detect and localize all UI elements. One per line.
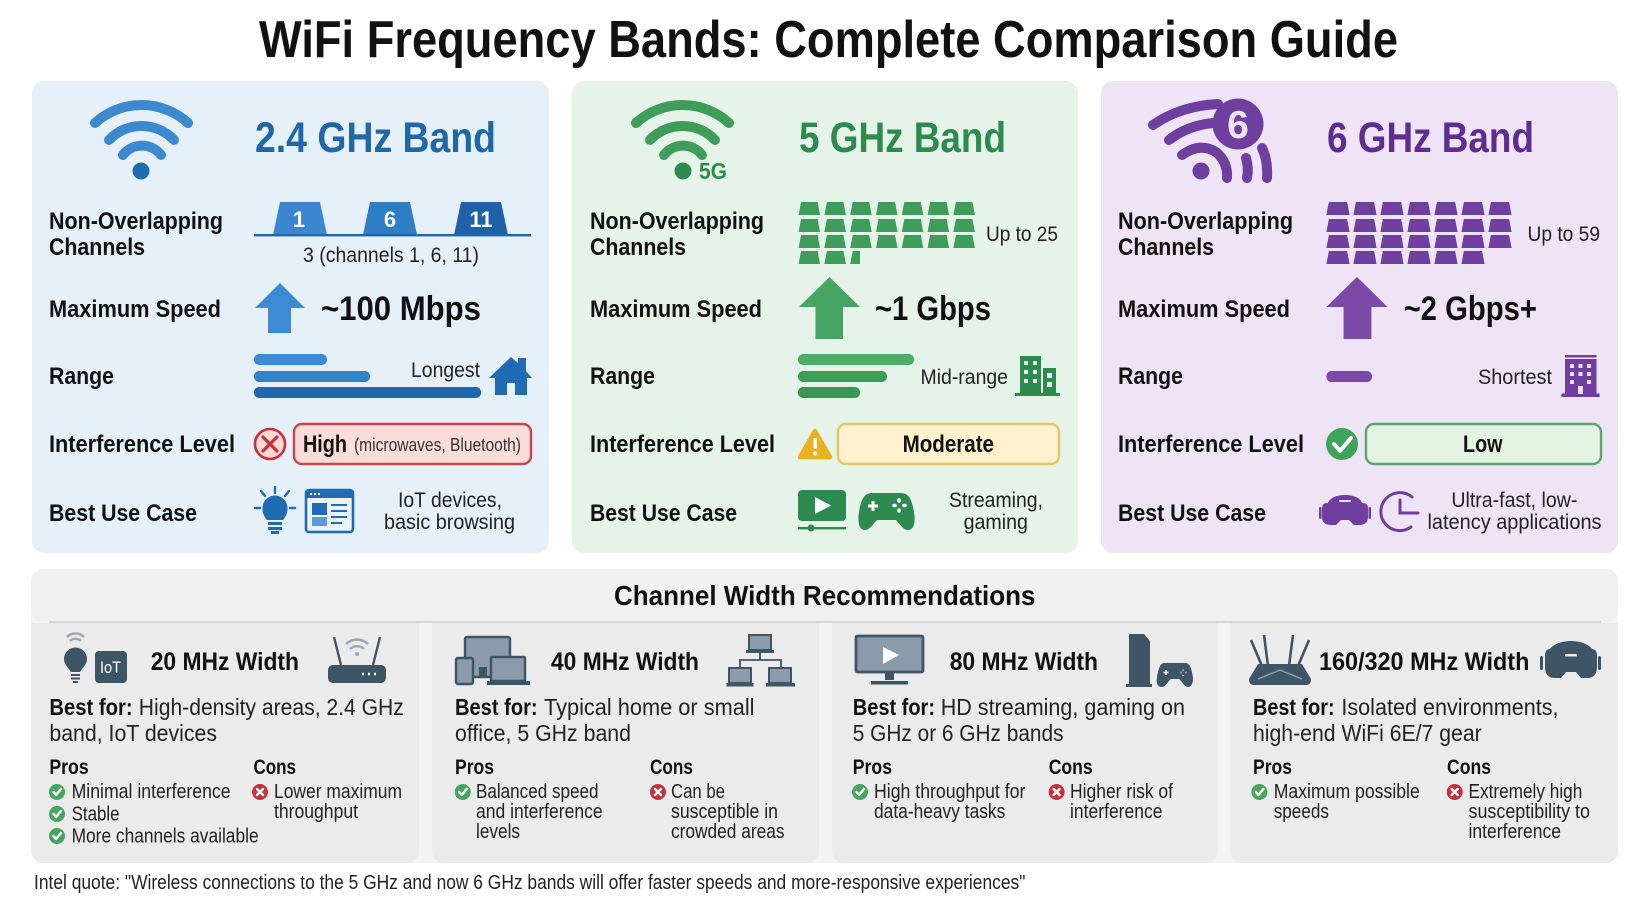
list: cons: throughput	[274, 801, 358, 823]
icon: router	[328, 637, 386, 683]
icon: TV	[856, 636, 923, 684]
list: pros: Stable	[72, 804, 120, 826]
title: WiFi Frequency Bands: Complete Comparison Guide	[259, 11, 1398, 69]
text: best for: Typical home or small	[544, 694, 754, 720]
list: pros	[49, 756, 259, 848]
heading: channel width recommendations: Channel Width Recommendations	[614, 580, 1036, 611]
list: cons: Cons	[254, 756, 296, 779]
list: pros: and interference	[476, 801, 603, 823]
text: ultra-fast, low-latency applications: Ultra-fast, low-	[1451, 489, 1577, 512]
list: cons	[1049, 756, 1173, 823]
icon: console and gamepad	[1126, 634, 1193, 687]
heading: 160/320 MHz Width: 160/320 MHz Width	[1319, 648, 1529, 676]
text: best for: Isolated environments,	[1341, 694, 1558, 720]
list: pros	[1251, 756, 1420, 823]
text: up to 25: Up to 25	[986, 223, 1058, 246]
text: longest: Longest	[411, 359, 480, 382]
list: cons	[252, 756, 402, 823]
list: pros: Maximum possible	[1274, 781, 1420, 803]
value: speed: ~2 Gbps+	[1404, 290, 1537, 328]
icon: tri-band router	[1249, 635, 1311, 685]
icon: low interference	[1326, 428, 1358, 460]
arrow: speed	[1326, 277, 1388, 339]
icon: wifi 2.4 GHz	[95, 105, 188, 180]
list: pros: data-heavy tasks	[874, 801, 1005, 823]
icon: wifi 6: 6	[1227, 104, 1249, 147]
list: pros: Balanced speed	[476, 781, 598, 803]
panel: 5 GHz band	[572, 81, 1078, 553]
list: pros: Pros	[49, 756, 89, 779]
icon: smart bulb	[64, 633, 87, 683]
label: non-overlapping channels: Channels	[590, 234, 686, 261]
icon: office buildings	[1015, 356, 1060, 396]
list: cons: crowded areas	[671, 821, 784, 843]
text: IoT devices, basic browsing: basic browsing	[384, 511, 515, 534]
arrow: speed	[255, 283, 305, 333]
heading: 40 MHz Width: 40 MHz Width	[551, 648, 699, 676]
label: best use case: Best Use Case	[1118, 500, 1266, 527]
chart: 59 channels	[1326, 202, 1512, 264]
label: non-overlapping channels: Channels	[49, 234, 145, 261]
text: channel count: 3 (channels 1, 6, 11)	[303, 244, 479, 267]
text: best for: High-density areas, 2.4 GHz	[139, 694, 404, 720]
label: range: Range	[49, 363, 114, 390]
heading: 80 MHz Width: 80 MHz Width	[950, 648, 1098, 676]
text: best for	[853, 694, 1185, 746]
icon: browser	[306, 490, 353, 532]
text: best for: office, 5 GHz band	[455, 720, 631, 746]
heading: 20 MHz Width: 20 MHz Width	[151, 648, 299, 676]
list: cons: interference	[1468, 821, 1561, 843]
label: non-overlapping channels: Non-Overlapping	[49, 208, 223, 235]
panel: channel width recommendations	[31, 569, 1618, 863]
list: cons: Can be	[671, 781, 725, 803]
text: best for: Best for:	[455, 694, 538, 720]
icon: house	[489, 357, 532, 395]
badge: moderate	[838, 424, 1059, 464]
text: IoT devices, basic browsing: IoT devices,	[398, 489, 502, 512]
label: interference level: Interference Level	[590, 431, 775, 458]
text: best for: HD streaming, gaming on	[941, 694, 1185, 720]
icon: VR headset	[1540, 641, 1601, 678]
list: cons: interference	[1070, 801, 1162, 823]
text: streaming, gaming: Streaming,	[949, 489, 1043, 512]
badge: moderate: Moderate	[903, 431, 994, 458]
chart: channels 1, 6, 11: 6	[384, 207, 396, 232]
heading: 2.4 GHz Band: 2.4 GHz Band	[255, 114, 496, 162]
text: best for: band, IoT devices	[49, 720, 217, 746]
text: streaming, gaming: gaming	[964, 511, 1028, 534]
text: up to 59: Up to 59	[1528, 223, 1600, 246]
list: pros: Pros	[455, 756, 494, 779]
chart: range bars	[254, 354, 481, 398]
icon: wifi 5G: 5G	[699, 158, 727, 184]
text: best for: Best for:	[49, 694, 133, 720]
value: speed: ~100 Mbps	[321, 290, 481, 328]
chart: channels 1, 6, 11	[254, 202, 531, 236]
text: best for	[49, 694, 404, 746]
list: pros: speeds	[1274, 801, 1329, 823]
list: cons: Higher risk of	[1070, 781, 1173, 803]
text: best for: Best for:	[853, 694, 935, 720]
icon: warning	[800, 431, 830, 457]
label: non-overlapping channels	[49, 208, 223, 261]
list: pros: Pros	[1253, 756, 1292, 779]
list: cons: susceptibility to	[1468, 801, 1590, 823]
icon: IoT chip	[95, 651, 127, 683]
label: best use case: Best Use Case	[49, 500, 197, 527]
list: pros	[852, 756, 1026, 823]
label: non-overlapping channels	[1118, 208, 1293, 261]
chart: channels 1, 6, 11: 1	[293, 207, 305, 232]
icon: high interference	[255, 429, 285, 459]
card: 80 MHz	[832, 623, 1218, 863]
panel: 2.4 GHz band	[32, 81, 549, 553]
heading: 5 GHz Band: 5 GHz Band	[799, 114, 1006, 162]
icon: light bulb	[255, 487, 295, 534]
list: pros: Pros	[853, 756, 892, 779]
text: best for: high-end WiFi 6E/7 gear	[1253, 720, 1482, 746]
chart: 25 channels	[799, 202, 975, 264]
text: best for: Best for:	[1253, 694, 1335, 720]
list: pros: levels	[476, 821, 520, 843]
label: range: Range	[590, 363, 655, 390]
list: cons: Lower maximum	[274, 781, 402, 803]
text: best for	[1253, 694, 1558, 746]
text: shortest: Shortest	[1478, 366, 1552, 389]
icon: video player	[798, 490, 846, 532]
icon: VR headset	[1319, 495, 1371, 525]
badge: low: Low	[1463, 431, 1503, 458]
icon: devices	[456, 637, 530, 685]
text: best for	[455, 694, 754, 746]
badge: high: High	[303, 431, 347, 458]
icon: game controller	[858, 493, 915, 530]
label: best use case: Best Use Case	[590, 500, 737, 527]
label: non-overlapping channels: Channels	[1118, 234, 1214, 261]
label: non-overlapping channels: Non-Overlapping	[1118, 208, 1293, 235]
label: range: Range	[1118, 363, 1183, 390]
list: cons: susceptible in	[671, 801, 778, 823]
text: streaming, gaming	[949, 489, 1043, 534]
icon: network	[726, 635, 795, 686]
card: 20 MHz	[31, 623, 419, 863]
list: pros: More channels available	[72, 826, 259, 848]
panel: 6 GHz band	[1101, 81, 1618, 553]
text: ultra-fast, low-latency applications: latency applications	[1428, 511, 1602, 534]
icon: wifi 6	[1153, 98, 1267, 180]
badge: high: (microwaves, Bluetooth)	[354, 435, 521, 455]
list: cons	[1447, 756, 1590, 843]
text: best for: 5 GHz or 6 GHz bands	[853, 720, 1064, 746]
list: cons: Cons	[650, 756, 693, 779]
text: mid-range: Mid-range	[920, 366, 1008, 389]
value: speed: ~1 Gbps	[875, 290, 991, 328]
icon: IoT chip: IoT	[100, 658, 121, 677]
card: 40 MHz	[432, 623, 819, 863]
card: 160/320 MHz	[1230, 623, 1618, 863]
label: maximum speed: Maximum Speed	[1118, 296, 1290, 323]
icon: high-rise building	[1561, 355, 1600, 397]
label: non-overlapping channels	[590, 208, 764, 261]
list: cons: Extremely high	[1468, 781, 1582, 803]
chart: range bar	[1326, 371, 1372, 382]
list: pros: Minimal interference	[72, 781, 231, 803]
list: cons	[650, 756, 784, 843]
chart: range bars	[798, 354, 914, 398]
icon: wifi 5G	[636, 105, 729, 184]
text: IoT devices, basic browsing	[384, 489, 515, 534]
heading: 6 GHz Band: 6 GHz Band	[1327, 114, 1534, 162]
list: cons: Cons	[1447, 756, 1491, 779]
list: pros: High throughput for	[874, 781, 1026, 803]
list: cons: Cons	[1049, 756, 1093, 779]
text: ultra-fast, low-latency applications	[1428, 489, 1602, 534]
label: maximum speed: Maximum Speed	[49, 296, 221, 323]
label: maximum speed: Maximum Speed	[590, 296, 762, 323]
icon: clock	[1381, 493, 1418, 531]
label: non-overlapping channels: Non-Overlapping	[590, 208, 764, 235]
label: interference level: Interference Level	[49, 431, 235, 458]
badge: low	[1366, 424, 1601, 464]
list: pros	[455, 756, 603, 843]
arrow: speed	[799, 277, 860, 339]
badge: high	[294, 424, 531, 464]
quote: Intel: Intel quote: "Wireless connections to the 5 GHz and now 6 GHz bands will offer faster speeds and more-responsive experiences"	[34, 872, 1025, 894]
chart: channels 1, 6, 11: 11	[469, 207, 493, 232]
label: interference level: Interference Level	[1118, 431, 1304, 458]
